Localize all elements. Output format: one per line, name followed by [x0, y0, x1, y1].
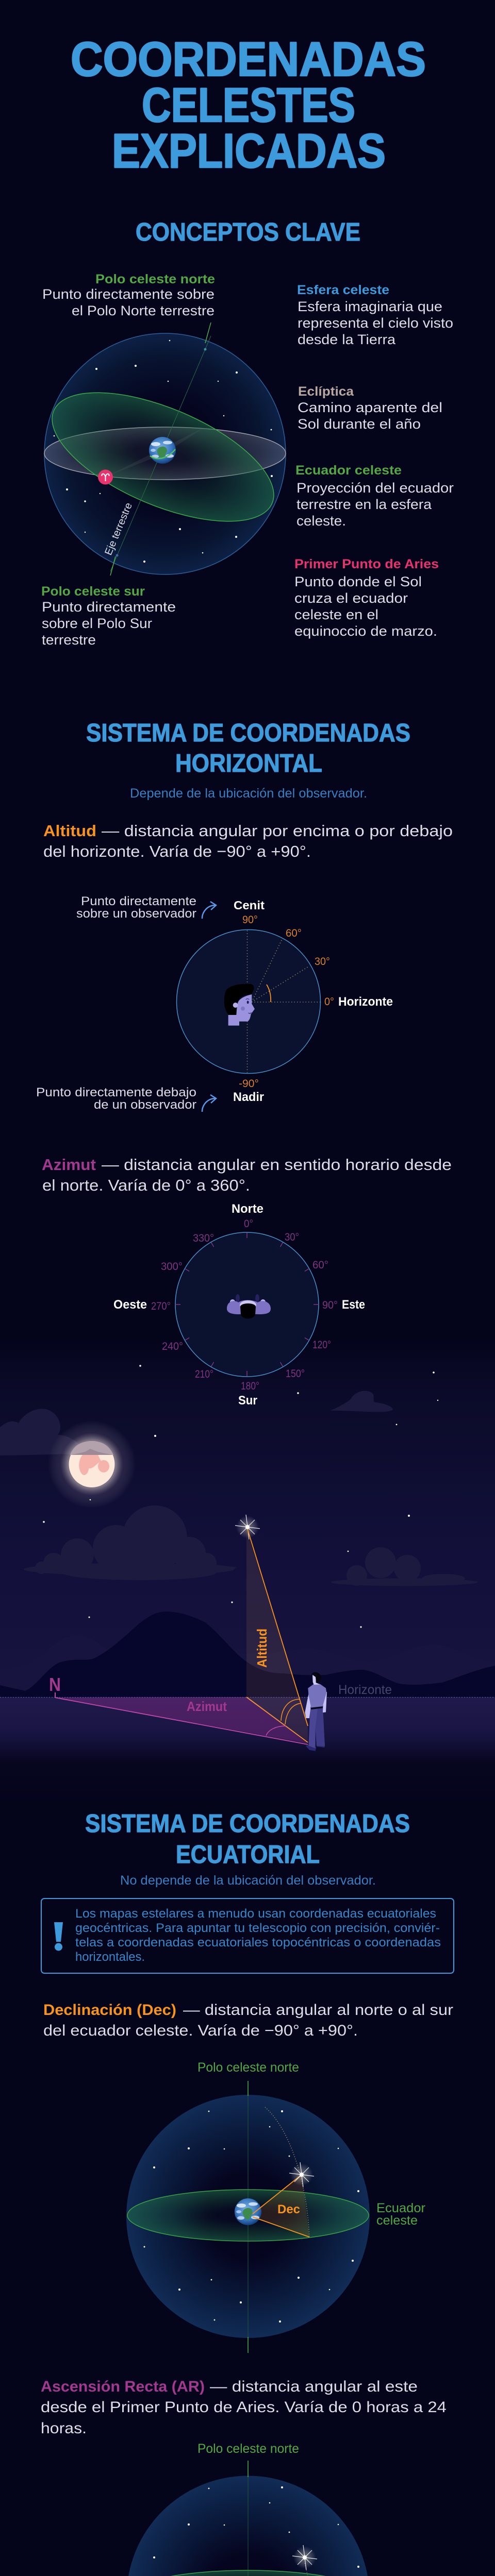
title: EXPLICADAS	[112, 124, 386, 178]
icon: moon	[48, 1420, 136, 1508]
chart: altitude dial	[36, 894, 393, 1112]
label: degrees azimuth: 330°	[193, 1232, 214, 1244]
text: ecliptica: Sol durante el año	[298, 416, 421, 432]
text: ascension recta definition	[41, 2378, 447, 2437]
callout: star maps note: telas a coordenadas ecuatoriales topocéntricas o coordenadas	[75, 1936, 441, 1950]
icon: observer standing	[305, 1672, 327, 1751]
text: altitud definition: Altitud	[43, 822, 96, 840]
callout: zenith note	[76, 894, 216, 921]
heading: sistema ecuatorial: ECUATORIAL	[176, 1841, 320, 1869]
subtitle: ecuatorial: No depende de la ubicación del observador.	[120, 1873, 376, 1888]
label: degrees azimuth: 0°	[244, 1218, 253, 1230]
label: degrees azimuth: 210°	[195, 1368, 213, 1380]
label: cardinal points: Oeste	[113, 1298, 147, 1312]
sightlines	[55, 1529, 308, 1744]
label: degrees azimuth	[151, 1218, 338, 1392]
text: ecuador celeste: Ecuador celeste	[295, 463, 402, 478]
label: degrees azimuth: 30°	[285, 1231, 299, 1243]
text: ascension recta definition: — distancia angular al este	[210, 2378, 418, 2395]
callout: star maps note: geocéntricas. Para apuntar tu telescopio con precisión, conviér-	[75, 1921, 440, 1935]
label: ecuador celeste: celeste	[376, 2213, 418, 2228]
title: CELESTES	[142, 78, 355, 132]
heading: conceptos clave: CONCEPTOS CLAVE	[136, 218, 360, 246]
label: ecuador celeste	[376, 2201, 425, 2228]
label: polo celeste norte: Polo celeste norte	[197, 2442, 299, 2456]
text: declinacion definition: — distancia angular al norte o al sur	[183, 2002, 453, 2019]
heading: sistema horizontal: HORIZONTAL	[175, 750, 322, 777]
heading: sistema horizontal: SISTEMA DE COORDENADAS	[86, 719, 410, 747]
label: degrees azimuth: 240°	[162, 1341, 183, 1352]
icon: observer head side view	[224, 984, 255, 1026]
text: altitud definition	[43, 822, 453, 860]
label: degrees azimuth: 150°	[286, 1368, 305, 1380]
celestial sphere diagram	[35, 323, 291, 575]
text: polo celeste norte: el Polo Norte terrestre	[72, 303, 214, 318]
text: polo celeste sur: sobre el Polo Sur	[42, 616, 152, 631]
text: polo celeste norte: Polo celeste norte	[95, 272, 215, 286]
text: azimut definition: el norte. Varía de 0° a 360°.	[42, 1176, 250, 1194]
text: ecuador celeste: Proyección del ecuador	[296, 480, 454, 496]
label: polo celeste norte: Polo celeste norte	[197, 2060, 299, 2075]
chart: azimuth dial	[113, 1202, 365, 1408]
text: esfera celeste	[297, 283, 453, 347]
text: polo celeste sur: Punto directamente	[42, 599, 176, 615]
horizon line	[0, 1697, 495, 1698]
text: polo celeste sur: Polo celeste sur	[41, 584, 145, 599]
label: cardinal points	[113, 1202, 365, 1408]
heading: sistema ecuatorial	[85, 1810, 410, 1869]
text: polo celeste norte: Punto directamente sobre	[42, 286, 214, 302]
text: primer punto de aries: celeste en el	[294, 607, 378, 622]
text: declinacion definition: del ecuador celeste. Varía de −90° a +90°.	[43, 2022, 358, 2039]
text: ecuador celeste: celeste.	[296, 513, 346, 529]
altitude wedge	[246, 1529, 308, 1741]
text: ecliptica: Eclíptica	[298, 384, 354, 399]
label: degrees azimuth: 90°	[322, 1299, 338, 1311]
text: polo celeste sur: terrestre	[42, 632, 96, 648]
text: esfera celeste: representa el cielo visto	[298, 315, 453, 331]
label: azimut: Azimut	[187, 1699, 227, 1714]
text: declinacion definition	[43, 2002, 453, 2039]
heading: sistema ecuatorial: SISTEMA DE COORDENADAS	[85, 1810, 410, 1838]
text: azimut definition: Azimut	[42, 1156, 96, 1174]
label: degrees altitude: 0°	[324, 996, 334, 1008]
title: COORDENADAS	[71, 32, 426, 86]
label: degrees azimuth: 120°	[312, 1339, 331, 1351]
label: altitud: Altitud	[254, 1629, 270, 1668]
label: dec: Dec	[277, 2202, 300, 2216]
subtitle: horizontal: Depende de la ubicación del observador.	[130, 786, 367, 801]
text: esfera celeste: desde la Tierra	[298, 332, 396, 347]
label: cenit: Cenit	[234, 899, 265, 912]
callout: nadir note: de un observador	[94, 1098, 196, 1112]
title	[71, 32, 426, 178]
text: polo celeste norte	[42, 272, 215, 318]
text: ecliptica	[298, 384, 442, 432]
mountains	[0, 1612, 495, 1697]
callout: star maps note: Los mapas estelares a menudo usan coordenadas ecuatoriales	[75, 1907, 436, 1921]
panel: night scene	[0, 1340, 495, 1803]
label: degrees azimuth: 270°	[151, 1300, 171, 1312]
label: horizonte: Horizonte	[338, 995, 393, 1009]
label: cardinal points: Este	[342, 1298, 365, 1312]
callout: star maps note: horizontales.	[75, 1950, 145, 1964]
chart: right ascension sphere	[126, 2461, 423, 2576]
label: eje terrestre: Eje terrestre	[103, 501, 135, 557]
text: polo celeste sur	[41, 584, 176, 648]
label: degrees azimuth: 180°	[241, 1380, 259, 1392]
label: cardinal points: Norte	[232, 1202, 263, 1216]
label: degrees azimuth: 60°	[312, 1259, 328, 1271]
text: ecliptica: Camino aparente del	[298, 400, 442, 415]
label: horizonte: Horizonte	[338, 1683, 392, 1697]
text: altitud definition: — distancia angular por encima o por debajo	[102, 822, 453, 840]
text: primer punto de aries: Primer Punto de Aries	[294, 557, 439, 571]
text: primer punto de aries: Punto donde el Sol	[294, 574, 422, 589]
label: degrees altitude: -90°	[239, 1078, 259, 1090]
text: primer punto de aries	[294, 557, 439, 639]
chart: declination sphere	[126, 2081, 425, 2353]
text: azimut definition	[42, 1156, 452, 1194]
label: degrees altitude: 90°	[242, 914, 258, 926]
text: azimut definition: — distancia angular en sentido horario desde	[102, 1156, 452, 1174]
text: ecuador celeste: terrestre en la esfera	[296, 497, 432, 512]
cloud group	[0, 1391, 477, 1586]
label: degrees altitude	[239, 914, 334, 1090]
label: degrees azimuth: 300°	[161, 1261, 183, 1273]
icon: observer head top view	[227, 1294, 271, 1319]
text: altitud definition: del horizonte. Varía de −90° a +90°.	[43, 842, 311, 860]
text: esfera celeste: Esfera celeste	[297, 283, 389, 297]
icon: Aries marker	[98, 470, 113, 484]
panel: conceptos clave	[35, 272, 454, 648]
label: nadir: Nadir	[233, 1090, 264, 1104]
callout: zenith note: Punto directamente	[81, 894, 196, 908]
text: declinacion definition: Declinación (Dec)	[43, 2002, 176, 2019]
text: primer punto de aries: equinoccio de marzo.	[294, 623, 437, 639]
heading: sistema horizontal	[86, 719, 410, 777]
label: cardinal points: Sur	[238, 1394, 257, 1408]
text: ascension recta definition: desde el Primer Punto de Aries. Varía de 0 horas a 24	[41, 2399, 447, 2416]
label: degrees altitude: 30°	[315, 956, 330, 968]
label: ecuador celeste: Ecuador	[376, 2201, 425, 2215]
stars: scene	[43, 1365, 438, 1628]
text: ascension recta definition: Ascensión Recta (AR)	[41, 2378, 205, 2395]
text: esfera celeste: Esfera imaginaria que	[298, 299, 442, 314]
label: degrees altitude: 60°	[286, 927, 302, 939]
icon: exclamation	[54, 1922, 63, 1951]
text: ascension recta definition: horas.	[41, 2420, 87, 2437]
text: primer punto de aries: cruza el ecuador	[294, 590, 408, 606]
icon: bright star	[235, 1515, 260, 1539]
callout: nadir note: Punto directamente debajo	[36, 1086, 196, 1099]
icon: north marker: N	[49, 1674, 61, 1695]
text: ecuador celeste	[295, 463, 454, 529]
callout: zenith note: sobre un observador	[76, 907, 196, 921]
callout: star maps note	[41, 1899, 454, 1973]
azimuth wedge	[55, 1697, 308, 1743]
callout: nadir note	[36, 1086, 216, 1112]
